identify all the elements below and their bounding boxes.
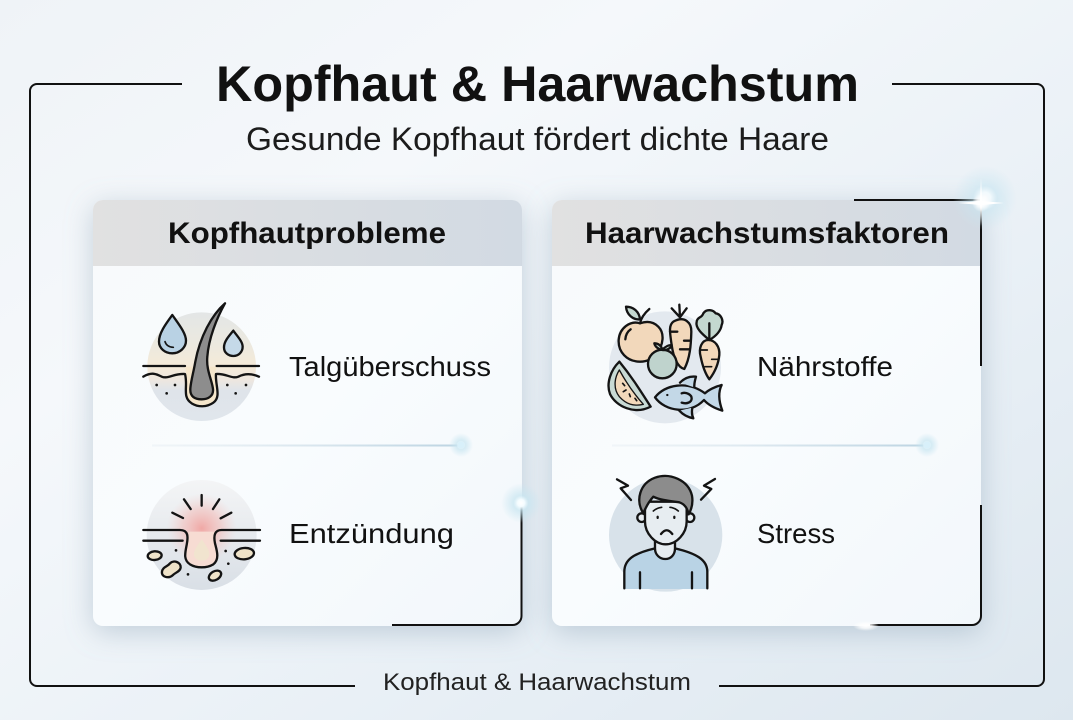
subtitle: Gesunde Kopfhaut fördert dichte Haare — [246, 121, 829, 157]
divider with glowing dot — [612, 433, 939, 457]
label: Entzündung: Entzündung — [289, 518, 454, 549]
title: Kopfhaut & Haarwachstum — [216, 56, 859, 112]
icon: hair follicle with oil drops — [143, 303, 259, 421]
accent lines on panels — [392, 200, 981, 625]
footer label: Kopfhaut & Haarwachstum — [383, 669, 691, 696]
label: Nährstoffe: Nährstoffe — [757, 351, 893, 382]
icon: inflamed follicle — [143, 480, 260, 590]
panel: Kopfhautprobleme — [93, 200, 522, 626]
panel header: Kopfhautprobleme: Kopfhautprobleme — [168, 217, 446, 250]
panel header: Kopfhautprobleme — [93, 200, 522, 266]
label: Talgüberschuss: Talgüberschuss — [289, 351, 491, 382]
glow sparkle: top right — [953, 166, 1017, 230]
panel header: Haarwachstumsfaktoren: Haarwachstumsfaktoren — [585, 217, 949, 250]
outer frame — [30, 84, 1044, 686]
panel: Haarwachstumsfaktoren — [552, 200, 981, 626]
icon: nutrition foods — [609, 305, 722, 423]
icon: stressed person — [609, 476, 722, 592]
divider with glowing dot — [152, 433, 473, 457]
label: Stress: Stress — [757, 518, 835, 549]
glow sparkle: left panel edge — [501, 483, 541, 523]
panel header: Haarwachstumsfaktoren — [552, 200, 981, 266]
glow sparkle: right panel bottom — [853, 621, 879, 631]
